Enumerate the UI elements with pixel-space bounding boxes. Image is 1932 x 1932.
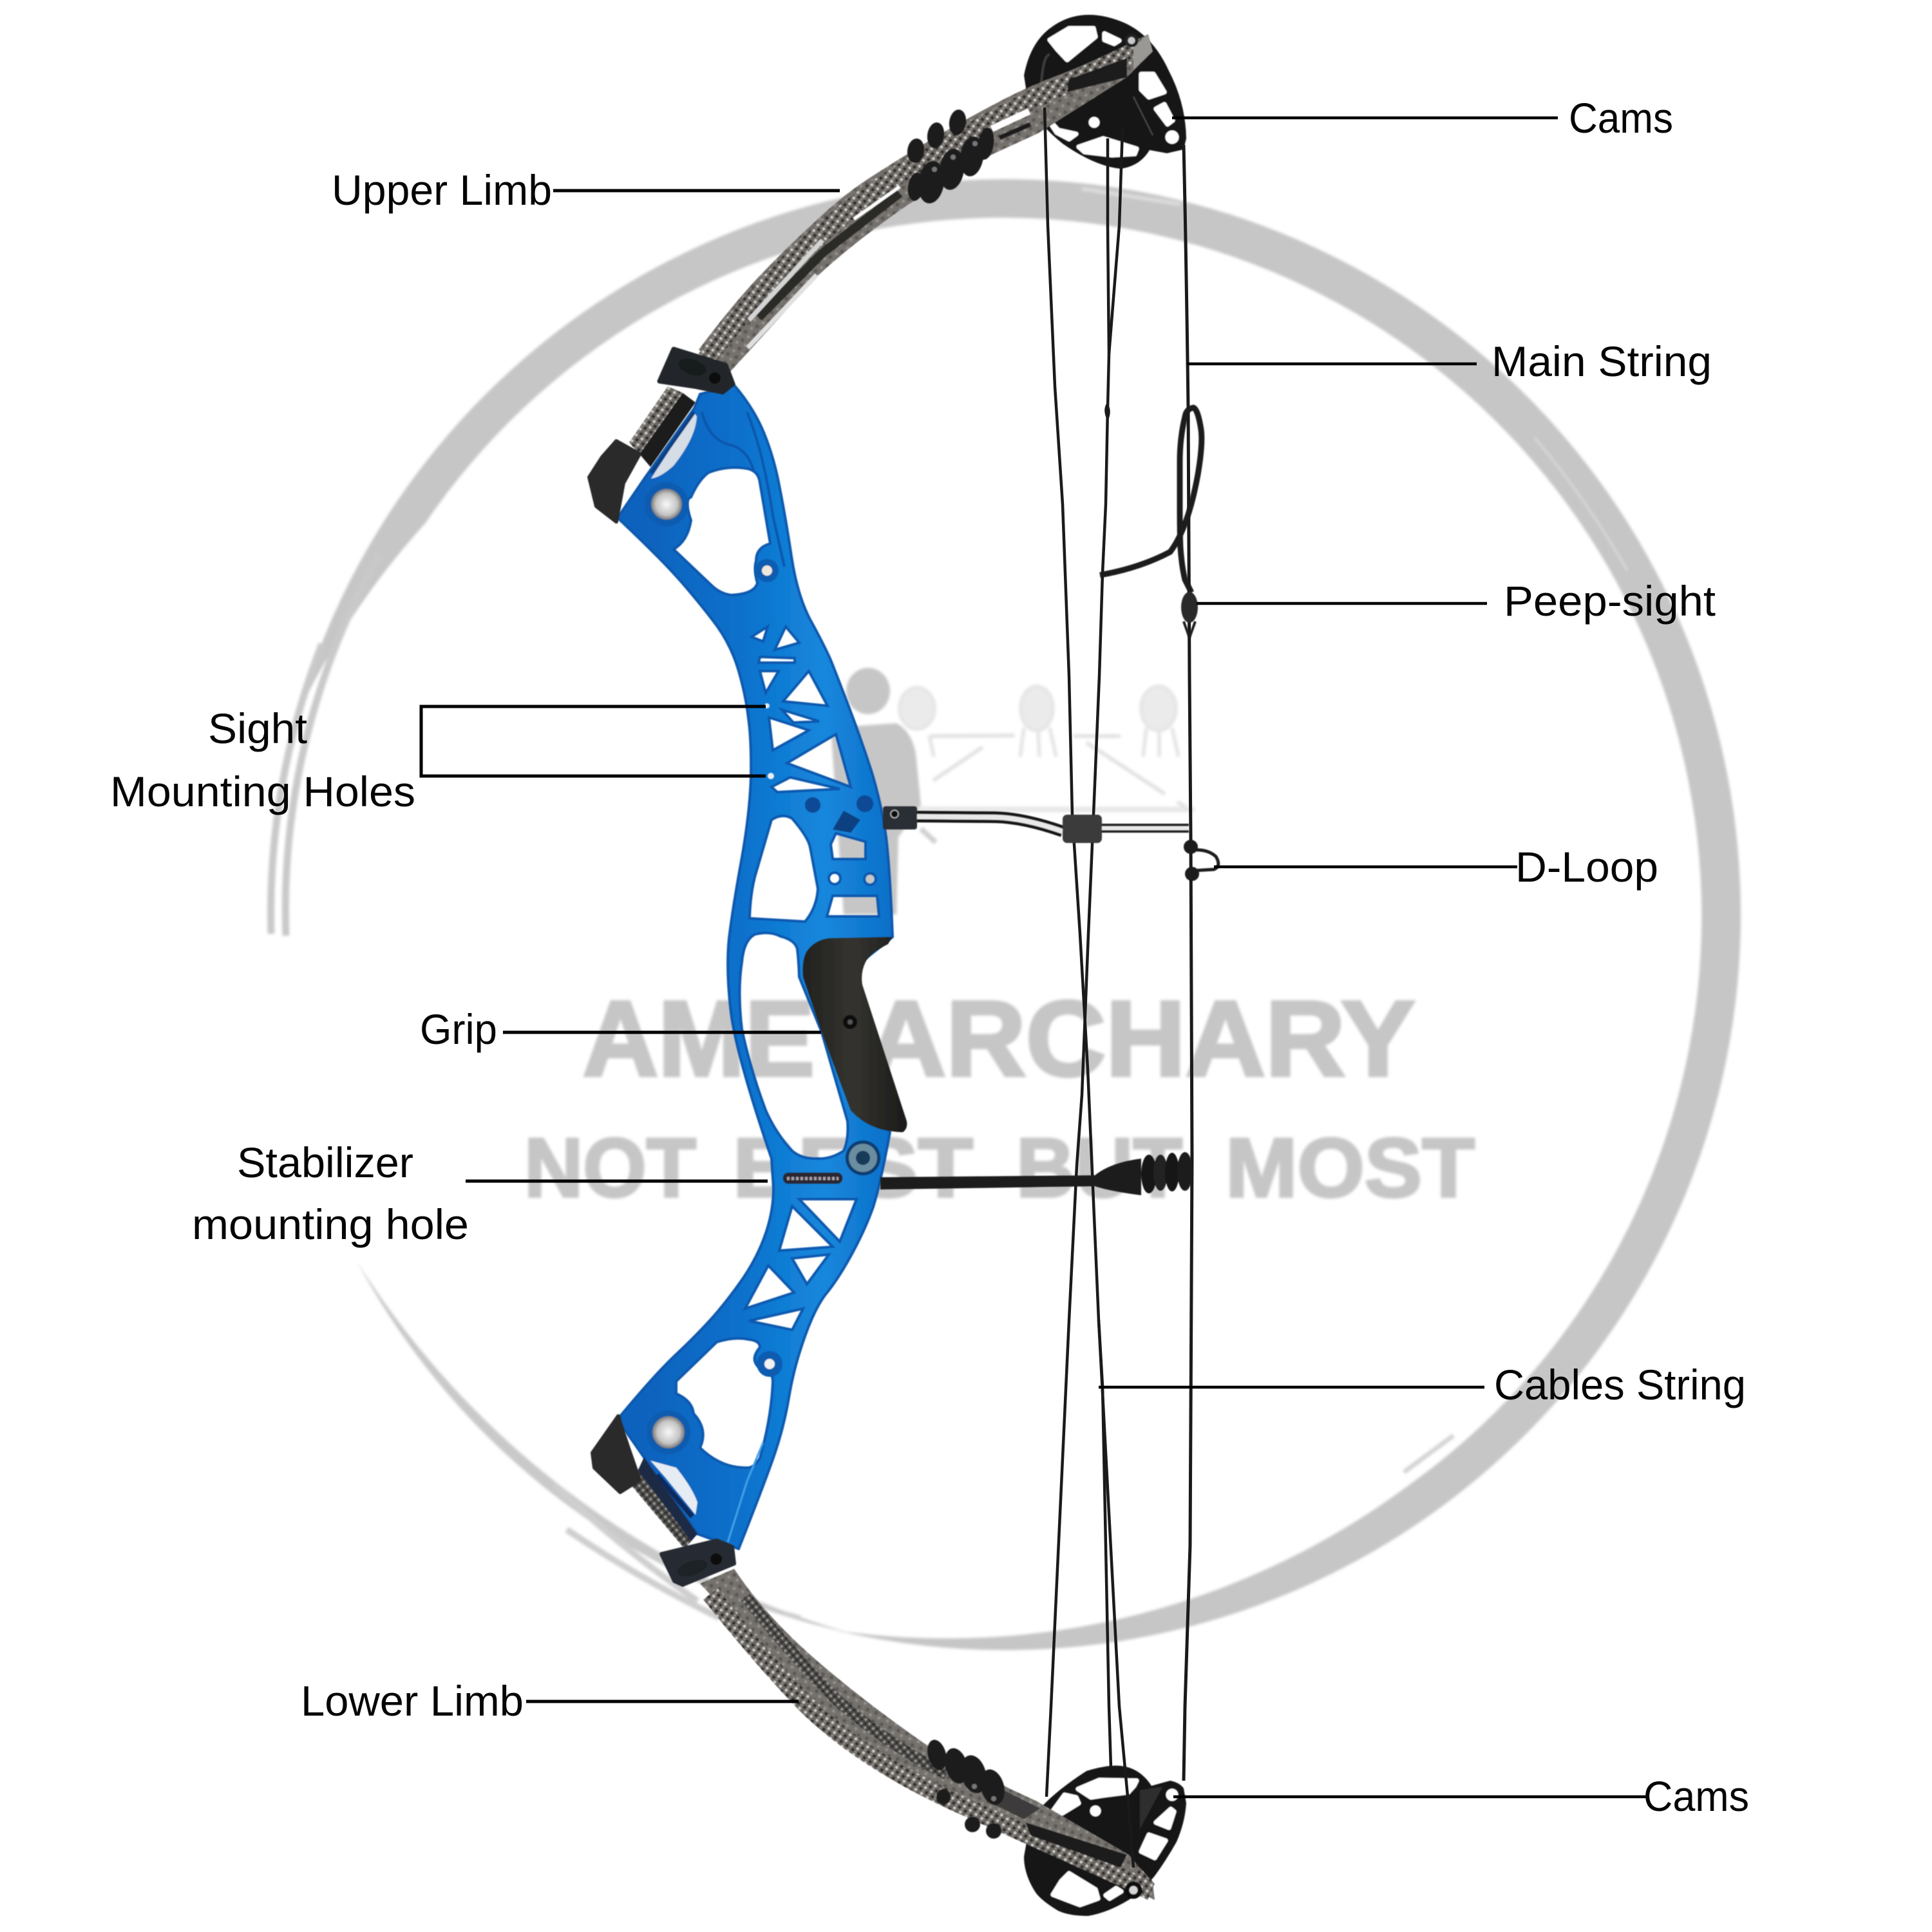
grip [803, 937, 907, 1132]
upper limb pocket end [589, 349, 733, 522]
label: lower limb: Lower Limb [301, 1677, 524, 1725]
lower limb [700, 1569, 1155, 1900]
label: stabilizer mounting hole: mounting hole [192, 1200, 469, 1248]
label: grip: Grip [420, 1005, 497, 1053]
label: upper cams: Cams [1569, 94, 1673, 142]
label: upper limb: Upper Limb [332, 166, 552, 214]
cable rod and slide [883, 806, 1189, 843]
watermark: brand text: NOT [524, 1121, 696, 1215]
riser bolts and pivot screws [645, 482, 873, 1454]
upper limb [699, 34, 1153, 372]
label: main string: Main String [1492, 337, 1712, 385]
label: D-loop: D-Loop [1515, 843, 1658, 891]
lower limb dampers [924, 1738, 1009, 1839]
cables strings [1045, 108, 1133, 1868]
D-loop [1184, 840, 1218, 881]
upper cam [1024, 15, 1186, 169]
label: sight mounting holes [110, 705, 766, 815]
label: lower cams: Cams [1643, 1772, 1749, 1820]
stabilizer mount and medallion [783, 1141, 880, 1184]
label: sight mounting holes: Mounting Holes [110, 768, 415, 815]
lower limb pocket end [592, 1416, 734, 1585]
label: stabilizer mounting hole [192, 1139, 768, 1248]
label: stabilizer mounting hole: Stabilizer [237, 1139, 413, 1186]
main string [1184, 145, 1192, 1781]
label: cables string: Cables String [1494, 1361, 1746, 1408]
watermark: brand text: BEST [733, 1121, 973, 1215]
riser [618, 385, 893, 1549]
label: sight mounting holes: Sight [208, 705, 307, 752]
upper limb dampers [905, 108, 996, 205]
watermark: brand text: BUT [1016, 1121, 1182, 1215]
watermark: brand text: ARCHARY [866, 980, 1415, 1099]
watermark: archer and targets logo [831, 668, 1195, 914]
watermark: brand text: MOST [1226, 1121, 1475, 1215]
peep sight and tubing [1100, 408, 1202, 638]
label: peep-sight: Peep-sight [1504, 577, 1716, 625]
watermark: brand text [524, 980, 1475, 1215]
stabilizer [880, 1152, 1193, 1195]
watermark: brushed ring logo [271, 179, 1741, 1650]
lower cam [1024, 1766, 1186, 1916]
watermark: brand text: AME [583, 980, 815, 1099]
